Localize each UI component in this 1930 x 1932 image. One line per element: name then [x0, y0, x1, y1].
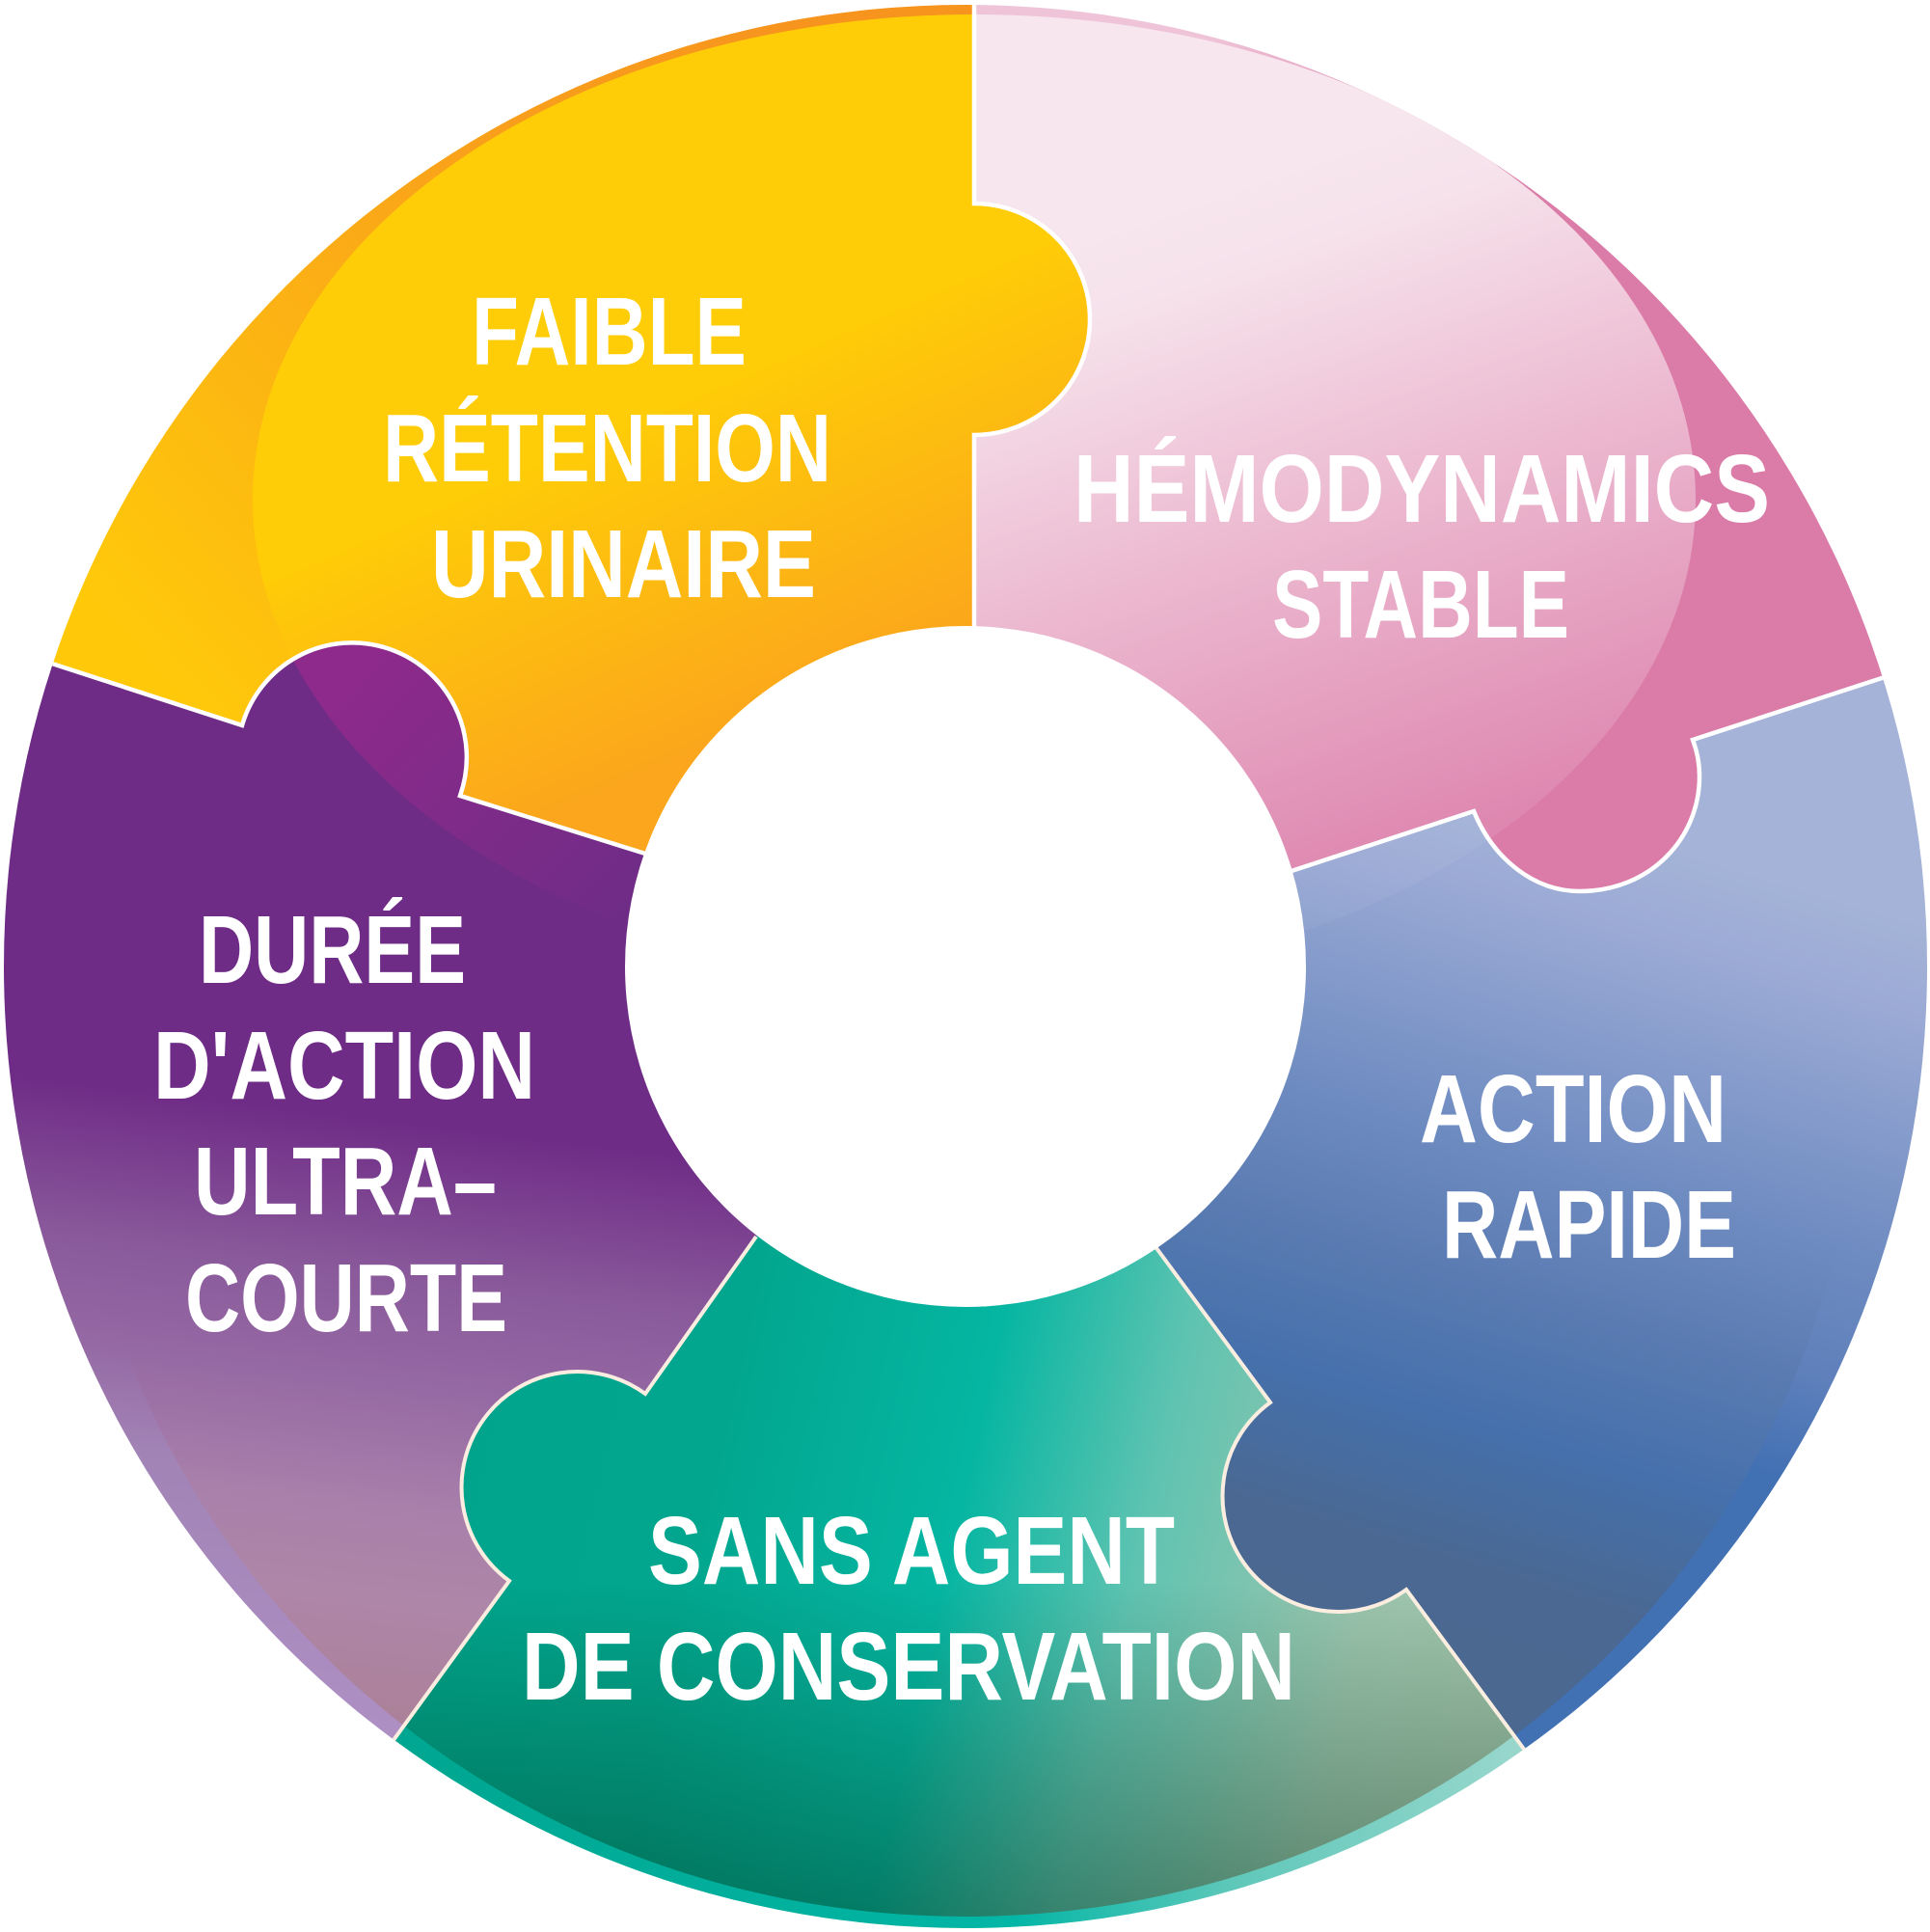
label: durée d'action ultra-courte: D'ACTION [153, 1012, 535, 1120]
label: hémodynamics stable [1074, 435, 1770, 659]
panel: hémodynamics stable (pink) [976, 5, 1883, 889]
label: hémodynamics stable: HÉMODYNAMICS [1074, 435, 1770, 543]
center hole [625, 626, 1306, 1307]
label: action rapide: RAPIDE [1442, 1171, 1736, 1279]
label: durée d'action ultra-courte: ULTRA– [194, 1128, 497, 1236]
panel: durée d'action ultra-courte (purple) [4, 644, 757, 1740]
label: sans agent de conservation [522, 1497, 1295, 1721]
label: action rapide: ACTION [1420, 1055, 1726, 1163]
panel: faible rétention urinaire (yellow) [52, 5, 1088, 852]
label: sans agent de conservation: DE CONSERVATION [522, 1613, 1295, 1721]
label: durée d'action ultra-courte: COURTE [185, 1244, 507, 1352]
panel: action rapide (blue) [1157, 678, 1927, 1750]
label: action rapide [1420, 1055, 1736, 1279]
label: faible rétention urinaire: URINAIRE [431, 510, 816, 618]
label: faible rétention urinaire: FAIBLE [472, 278, 747, 386]
label: durée d'action ultra-courte [153, 896, 535, 1352]
panel: sans agent de conservation (green) [394, 1236, 1524, 1928]
label: sans agent de conservation: SANS AGENT [648, 1497, 1175, 1605]
label: faible rétention urinaire [383, 278, 831, 618]
label: hémodynamics stable: STABLE [1272, 551, 1569, 659]
label: durée d'action ultra-courte: DURÉE [199, 896, 466, 1004]
label: faible rétention urinaire: RÉTENTION [383, 395, 831, 503]
